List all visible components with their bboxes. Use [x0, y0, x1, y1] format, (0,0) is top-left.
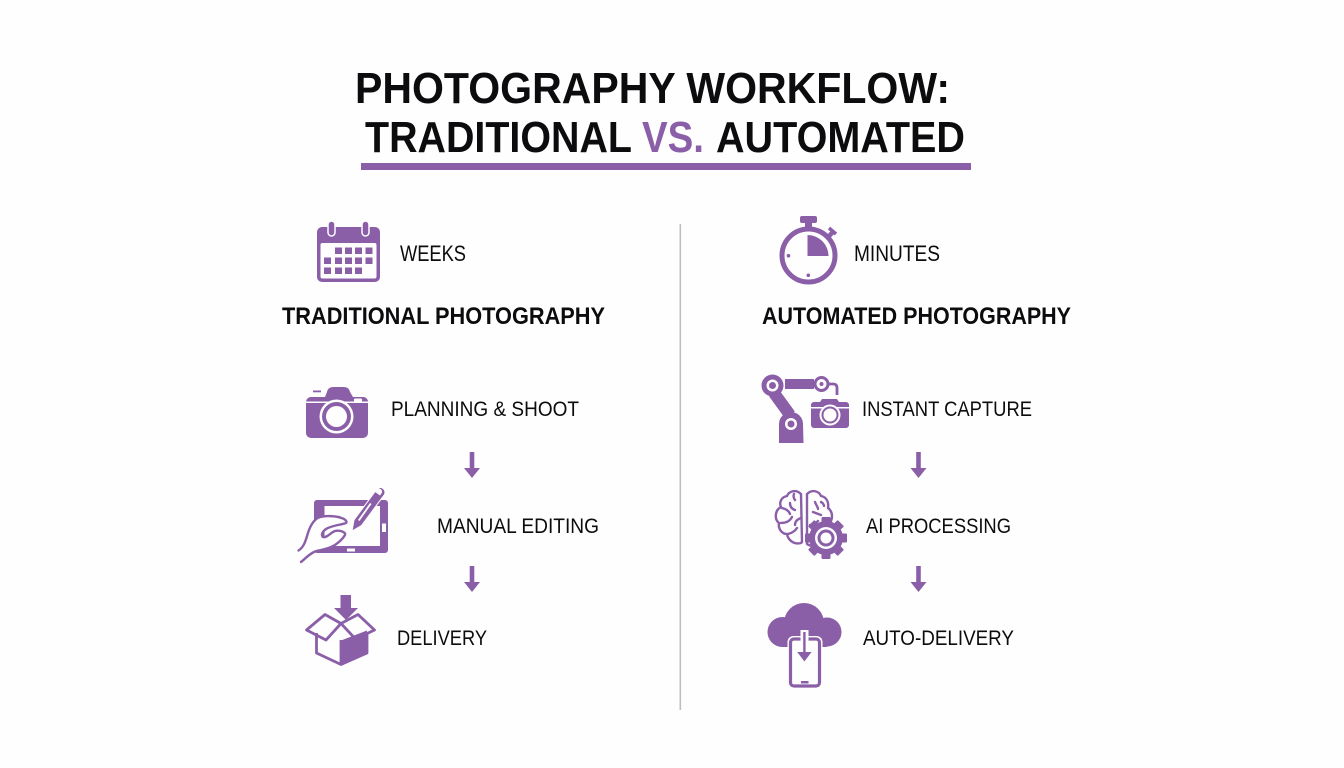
label: weeks: WEEKS [400, 241, 466, 266]
icon: brain with gear [776, 491, 847, 559]
title: TRADITIONAL [365, 113, 632, 162]
heading: traditional photography: TRADITIONAL PHOTOGRAPHY [282, 303, 605, 330]
arrow: capture to processing [910, 452, 926, 478]
arrow: editing to delivery [464, 566, 480, 592]
label: minutes: MINUTES [854, 241, 940, 266]
title: PHOTOGRAPHY WORKFLOW: [355, 64, 950, 113]
label: instant capture: INSTANT CAPTURE [862, 398, 1032, 421]
panel: traditional photography [282, 221, 605, 664]
title underline [361, 163, 971, 170]
title: AUTOMATED [716, 113, 965, 162]
label: planning and shoot: PLANNING & SHOOT [391, 398, 579, 421]
label: delivery: DELIVERY [397, 627, 487, 650]
title: VS. [642, 113, 704, 162]
arrow: processing to delivery [910, 566, 926, 592]
icon: tablet with hand and pen [298, 487, 388, 562]
icon: cloud with phone [768, 603, 842, 689]
label: manual editing: MANUAL EDITING [437, 515, 599, 538]
icon: stopwatch [782, 216, 836, 282]
label: ai processing: AI PROCESSING [866, 515, 1011, 538]
label: auto-delivery: AUTO-DELIVERY [863, 627, 1014, 650]
icon: calendar [317, 221, 380, 282]
icon: robot arm with camera [762, 374, 849, 443]
heading: automated photography: AUTOMATED PHOTOGRAPHY [762, 303, 1071, 330]
icon: box with down arrow [306, 595, 374, 664]
icon: camera [306, 387, 368, 438]
title [355, 64, 965, 162]
panel: automated photography [762, 216, 1071, 689]
arrow: planning to editing [464, 452, 480, 478]
